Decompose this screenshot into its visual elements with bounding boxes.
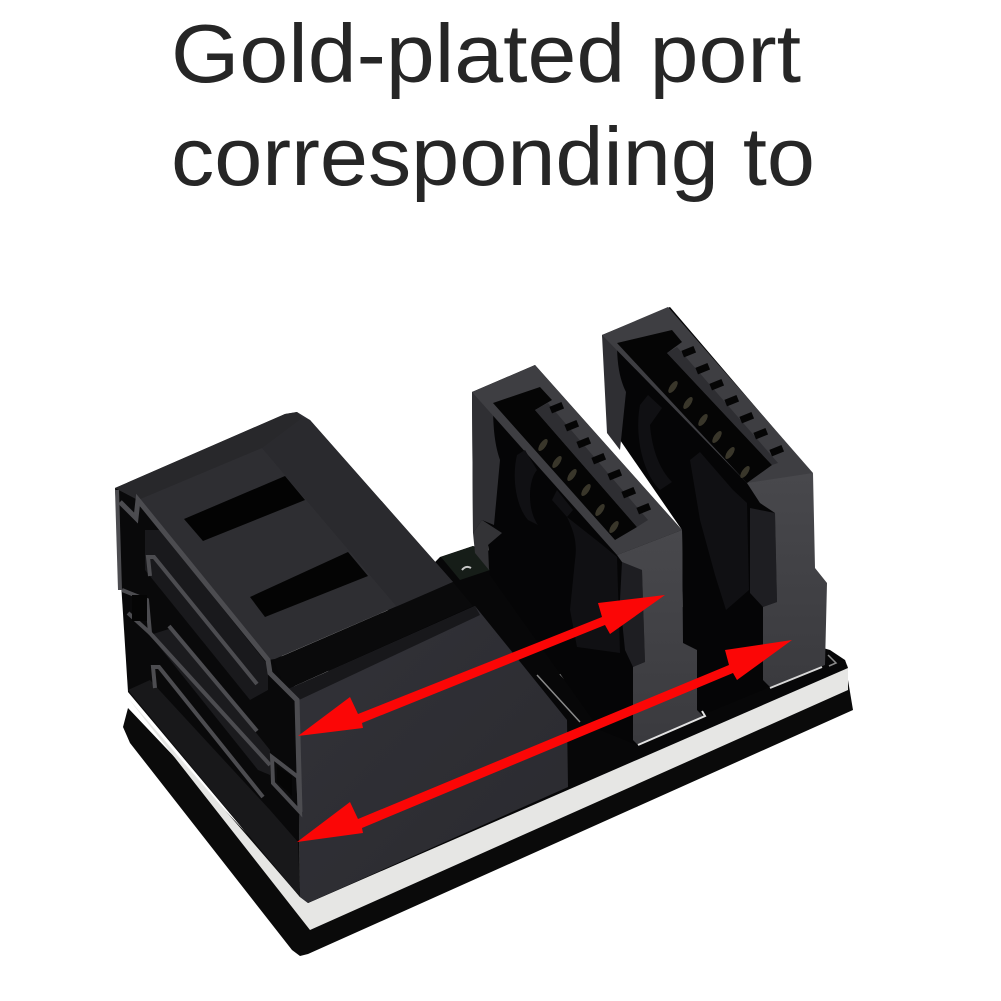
latch shapes [638, 395, 749, 610]
end-face gray rails [117, 490, 300, 812]
latch tab [473, 520, 502, 570]
latch shapes [515, 450, 620, 653]
arrow: upper double-headed [298, 595, 665, 736]
title [171, 7, 815, 203]
arrow: lower double-headed [297, 640, 792, 842]
title: corresponding to [171, 110, 815, 203]
circuit board base [123, 546, 853, 956]
gold contacts [667, 380, 751, 479]
inner latch band [145, 530, 268, 700]
connector body [602, 307, 825, 717]
gold contacts [537, 438, 620, 534]
left double connector [115, 412, 568, 903]
dark recess [620, 562, 645, 667]
adapter product illustration [115, 307, 853, 956]
slot [617, 330, 772, 483]
front side panel [286, 606, 568, 903]
top face [472, 365, 682, 555]
stem [747, 473, 827, 687]
black band [273, 582, 473, 690]
pin holes [681, 346, 784, 456]
left connector rear [472, 365, 705, 745]
pin holes [549, 402, 651, 514]
connector top face [115, 412, 453, 660]
side wall [602, 335, 626, 450]
right connector rear [602, 307, 827, 717]
title: Gold-plated port [171, 7, 801, 100]
dark recess [750, 508, 777, 607]
opening: front window [250, 552, 368, 617]
lower end-face shading [128, 680, 300, 897]
side wall [472, 392, 500, 533]
stem [617, 530, 704, 745]
slot [493, 387, 637, 540]
top face [602, 307, 813, 502]
tongue [535, 403, 648, 527]
opening: rear window [184, 476, 305, 541]
connector end face [115, 488, 300, 897]
end-face square openings [132, 595, 147, 621]
connector body [472, 365, 697, 745]
tongue [667, 347, 778, 465]
